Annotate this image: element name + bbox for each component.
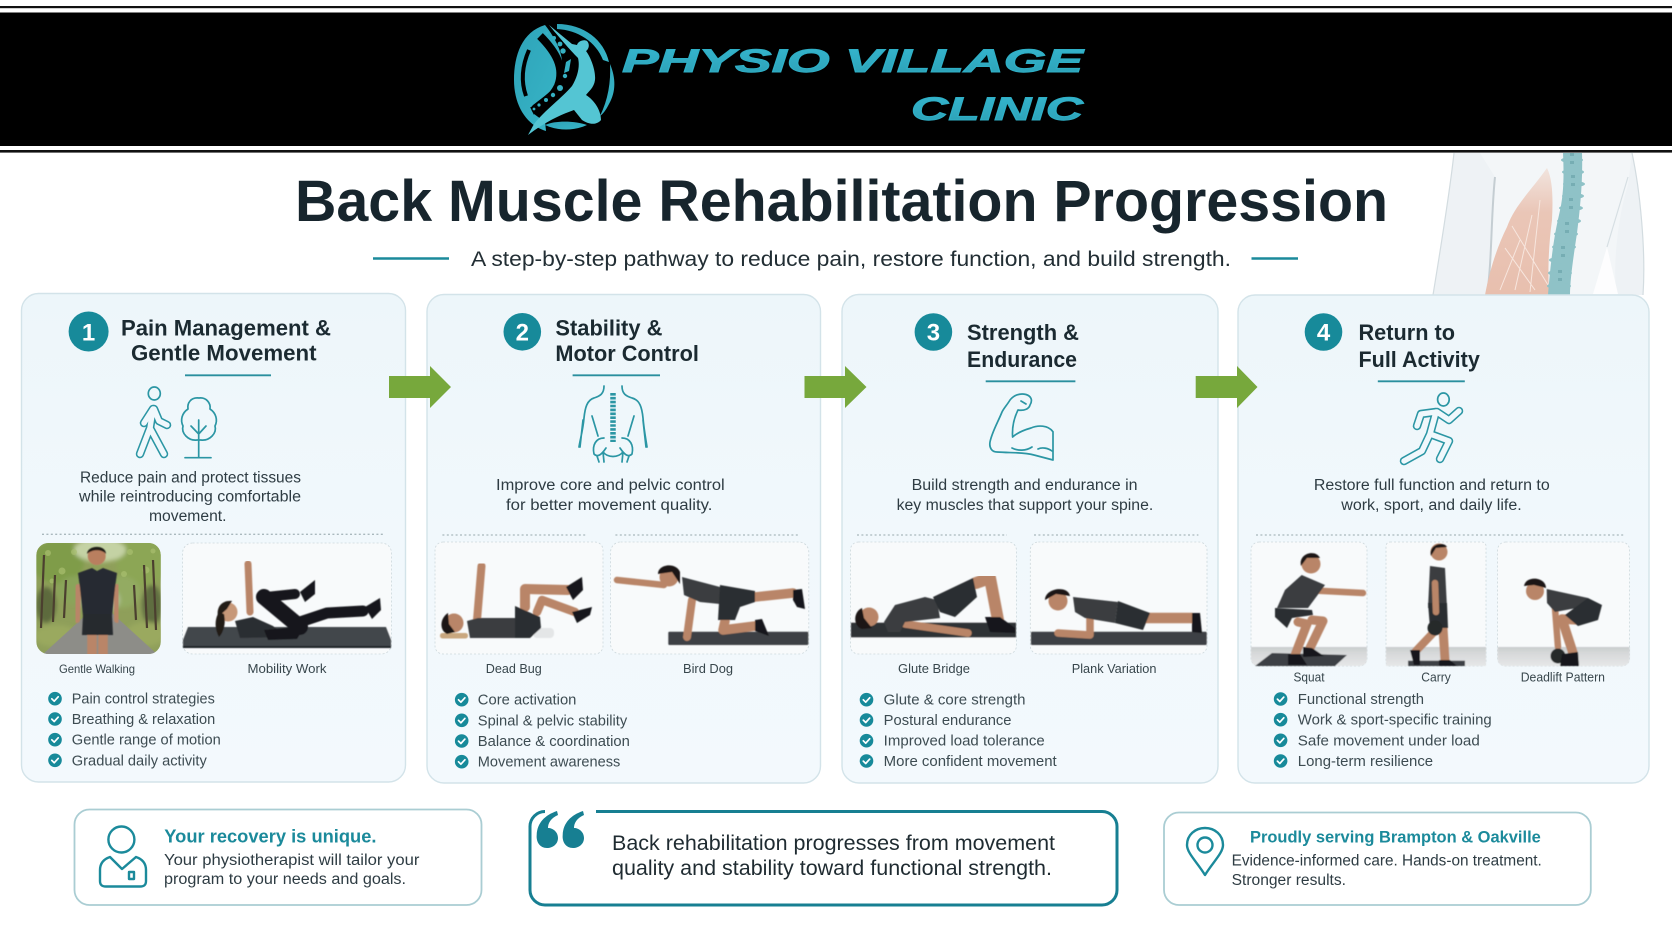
checklist: Safe movement under load (1298, 733, 1480, 749)
description (1314, 477, 1550, 514)
back anatomy illustration (1433, 153, 1644, 295)
checklist: Pain control strategies (72, 692, 215, 708)
captions: Mobility Work (248, 661, 327, 676)
photo: squat (1251, 542, 1367, 666)
callout text: program to your needs and goals. (164, 871, 406, 888)
callout text (1232, 853, 1542, 889)
description: while reintroducing comfortable (78, 489, 301, 506)
icon: physiotherapist (100, 826, 146, 886)
quote text: quality and stability toward functional strength. (612, 857, 1052, 880)
quote text: Back rehabilitation progresses from movement (612, 832, 1055, 855)
icon: location pin (1187, 828, 1223, 875)
description: Build strength and endurance in (912, 477, 1138, 494)
callout text: Evidence-informed care. Hands-on treatment. (1232, 853, 1542, 870)
description (897, 477, 1153, 514)
checklist (455, 693, 630, 771)
step number 1 (69, 312, 109, 352)
checklist: Glute & core strength (884, 693, 1026, 709)
captions: Gentle Walking (59, 662, 135, 676)
description: Restore full function and return to (1314, 477, 1550, 494)
photo: plank variation (1030, 542, 1207, 654)
icon: walker and tree (140, 387, 216, 458)
heading: Stability & (555, 316, 662, 341)
checklist: Functional strength (1298, 692, 1424, 708)
checklist: Postural endurance (884, 713, 1012, 729)
step number 2 (504, 313, 541, 351)
panel: step 4 return to activity (1238, 295, 1649, 783)
captions (486, 661, 733, 676)
photo: gentle walking (36, 543, 161, 654)
icon: flexed arm (990, 394, 1053, 460)
callout heading: Proudly serving Brampton & Oakville (1250, 828, 1541, 846)
subtitle: A step-by-step pathway to reduce pain, restore function, and build strength. (471, 247, 1231, 271)
heading: Endurance (967, 347, 1077, 372)
panel: step 1 pain management (22, 294, 406, 782)
description: Improve core and pelvic control (496, 477, 725, 494)
step number 3 (915, 313, 952, 351)
callout text (164, 852, 419, 888)
heading: Motor Control (555, 341, 699, 366)
captions: Deadlift Pattern (1521, 671, 1605, 685)
checklist: More confident movement (884, 754, 1057, 770)
heading: Strength & (967, 320, 1079, 345)
captions: Squat (1294, 671, 1325, 685)
checklist (48, 692, 221, 769)
icon: spine and torso (579, 386, 647, 462)
heading: Full Activity (1358, 347, 1480, 372)
description: Reduce pain and protect tissues (80, 469, 301, 486)
icon: quotation marks (537, 811, 584, 848)
checklist: Work & sport-specific training (1298, 713, 1492, 729)
checklist: Movement awareness (478, 755, 620, 771)
captions (59, 661, 327, 676)
heading (555, 316, 699, 375)
checklist: Long-term resilience (1298, 754, 1433, 770)
logo wordmark: Physio Village: PHYSIO VILLAGE (622, 43, 1086, 79)
photo: bird dog (611, 542, 809, 654)
captions (898, 661, 1156, 676)
checklist: Balance & coordination (478, 734, 630, 750)
heading (967, 320, 1079, 381)
description: key muscles that support your spine. (897, 497, 1153, 514)
callout text: Your physiotherapist will tailor your (164, 852, 419, 869)
callout: your recovery is unique (74, 810, 482, 905)
photo: glute bridge (850, 542, 1016, 654)
title: Back Muscle Rehabilitation Progression (295, 169, 1388, 234)
checklist: Improved load tolerance (884, 734, 1045, 750)
description (496, 477, 725, 514)
step number 4: 4 (1317, 320, 1331, 347)
logo (514, 24, 1086, 135)
description: movement. (149, 508, 226, 525)
callout: key quote (530, 806, 1117, 905)
arrow 2 to 3 (804, 366, 866, 408)
checklist (860, 693, 1057, 770)
icon: runner (1404, 393, 1459, 461)
captions (1294, 671, 1605, 685)
heading: Gentle Movement (131, 340, 317, 365)
logo emblem (514, 24, 614, 135)
description: for better movement quality. (506, 497, 712, 514)
photo: deadlift pattern (1498, 542, 1630, 666)
arrow 3 to 4 (1196, 366, 1258, 408)
captions: Carry (1421, 671, 1452, 685)
checklist: Gradual daily activity (72, 753, 208, 769)
panel: step 3 strength (842, 294, 1218, 783)
callout text: Stronger results. (1232, 872, 1346, 889)
photo: mobility work (183, 543, 392, 654)
panel: step 2 stability (427, 294, 820, 783)
step number 2: 2 (516, 320, 529, 346)
description: work, sport, and daily life. (1340, 497, 1522, 514)
photo: carry (1386, 542, 1486, 666)
arrow 1 to 2 (389, 366, 451, 408)
heading: Return to (1358, 320, 1455, 345)
logo wordmark: Clinic: CLINIC (911, 91, 1084, 127)
heading: Pain Management & (121, 316, 331, 341)
captions: Plank Variation (1072, 661, 1156, 676)
checklist (1274, 692, 1492, 770)
step number 4 (1305, 313, 1342, 351)
callout: service area (1164, 812, 1591, 905)
step number 1: 1 (82, 320, 95, 346)
description (78, 469, 301, 525)
captions: Bird Dog (683, 661, 733, 676)
captions: Dead Bug (486, 661, 542, 676)
heading (121, 316, 331, 375)
captions: Glute Bridge (898, 661, 970, 676)
heading (1358, 320, 1480, 381)
checklist: Spinal & pelvic stability (478, 713, 628, 729)
step number 3: 3 (927, 320, 940, 347)
checklist: Breathing & relaxation (72, 712, 215, 728)
quote text (612, 832, 1055, 880)
checklist: Core activation (478, 693, 576, 709)
callout heading: Your recovery is unique. (164, 827, 376, 847)
photo: dead bug (435, 542, 603, 654)
checklist: Gentle range of motion (72, 733, 221, 749)
header banner (0, 6, 1672, 153)
